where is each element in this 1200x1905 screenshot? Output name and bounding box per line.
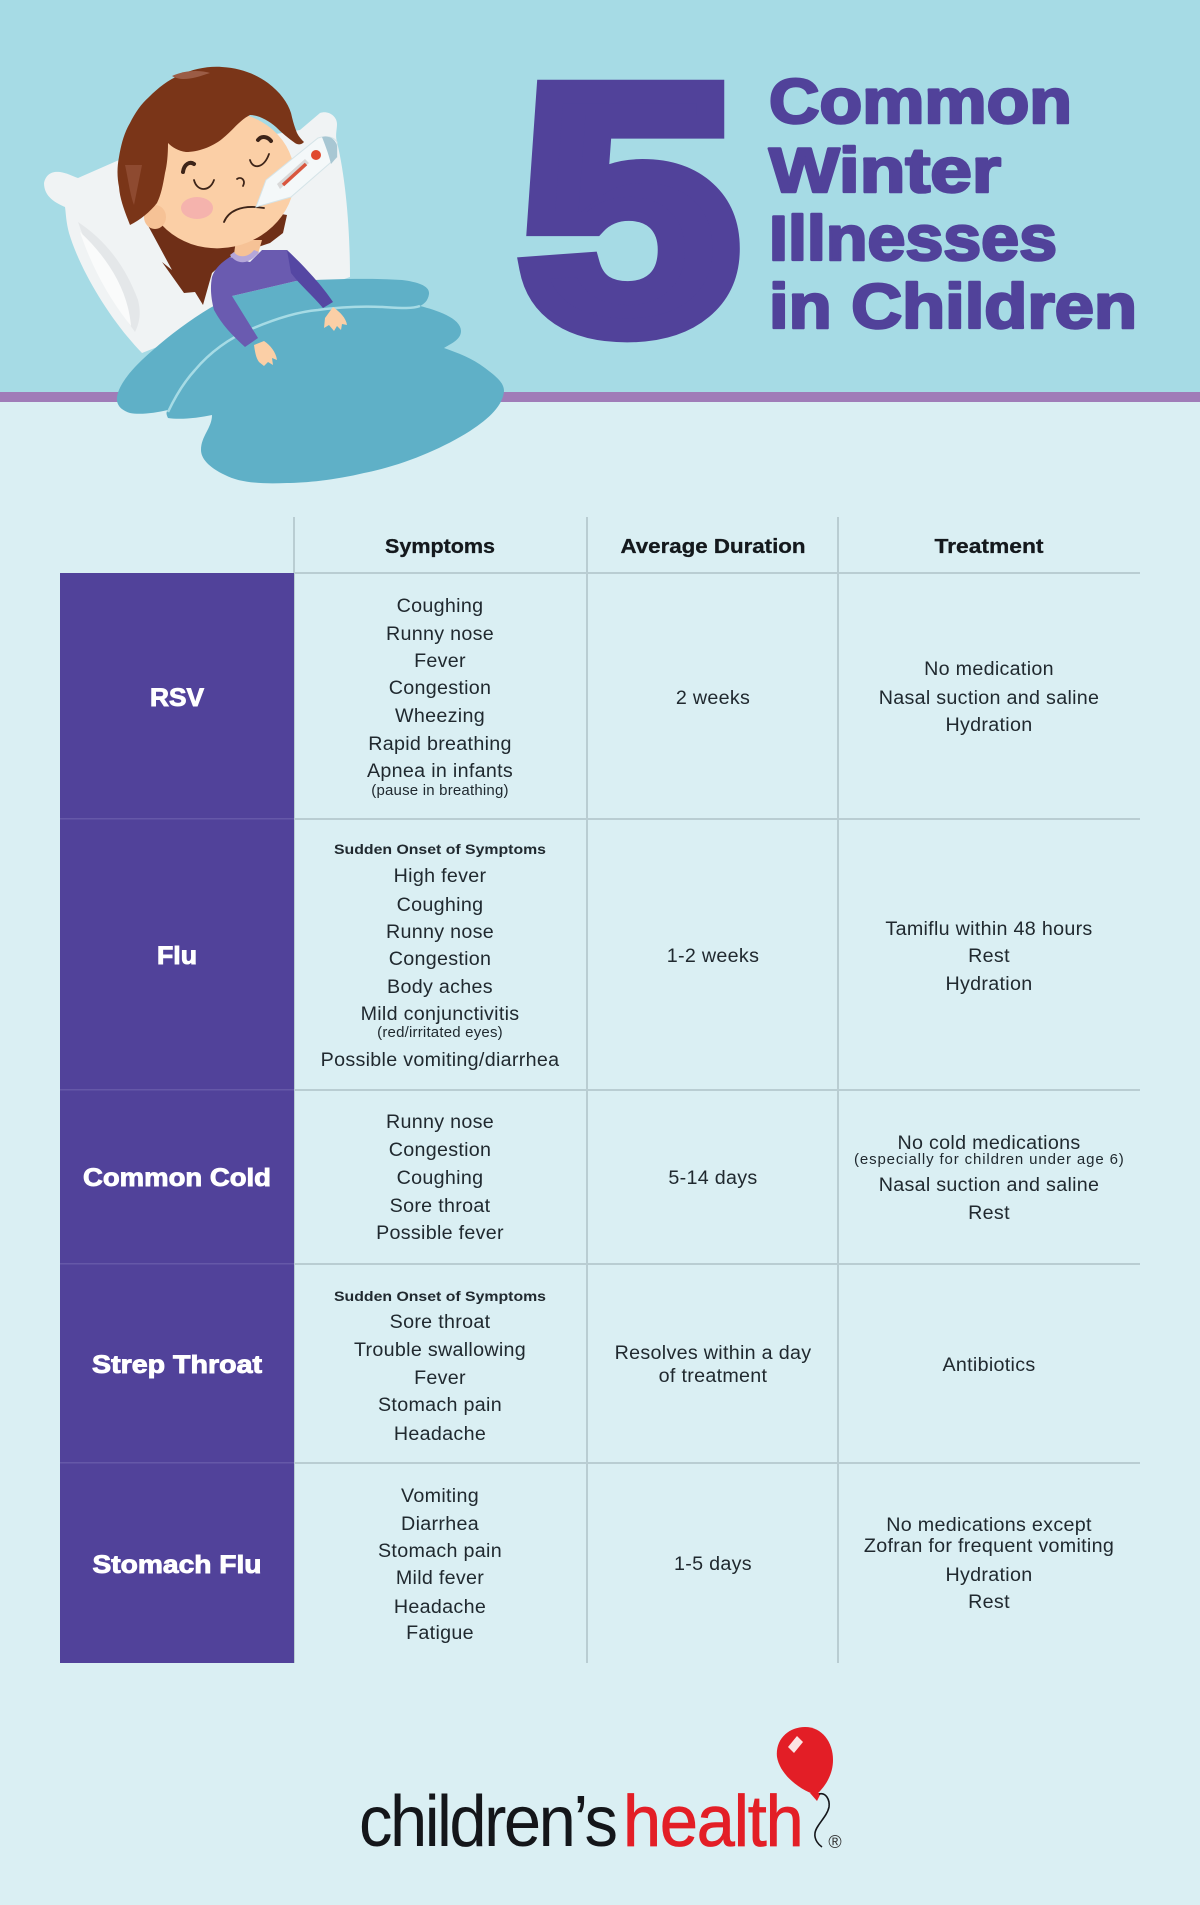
Common Cold treatment: No cold medications xyxy=(898,1132,1080,1154)
icon: red balloon xyxy=(777,1727,833,1847)
row label: Stomach Flu: Stomach Flu xyxy=(92,1551,262,1579)
row label: Stomach Flu xyxy=(60,1463,294,1663)
RSV duration: 2 weeks xyxy=(676,687,750,709)
Common Cold symptoms: Sore throat xyxy=(390,1195,491,1217)
RSV symptoms: (pause in breathing) xyxy=(371,782,509,799)
RSV symptoms xyxy=(367,595,513,799)
Flu symptoms: Mild conjunctivitis xyxy=(361,1003,519,1025)
title: Illnesses xyxy=(769,204,1057,274)
Flu symptoms: High fever xyxy=(394,865,487,887)
Common Cold symptoms: Congestion xyxy=(389,1139,491,1161)
thermometer xyxy=(256,137,337,207)
Common Cold symptoms: Runny nose xyxy=(386,1111,494,1133)
Common Cold treatment: (especially for children under age 6) xyxy=(854,1151,1124,1168)
Flu duration: 1-2 weeks xyxy=(667,945,759,967)
Flu symptoms: (red/irritated eyes) xyxy=(377,1024,503,1041)
Flu treatment: Hydration xyxy=(946,973,1032,995)
Stomach Flu symptoms: Fatigue xyxy=(406,1622,474,1644)
Flu treatment xyxy=(885,918,1093,995)
row label: Strep Throat: Strep Throat xyxy=(92,1351,263,1379)
title xyxy=(769,67,1137,342)
RSV symptoms: Runny nose xyxy=(386,623,494,645)
logo wordmark xyxy=(359,1780,803,1862)
Stomach Flu treatment: Rest xyxy=(968,1591,1010,1613)
title: Winter xyxy=(769,136,1001,206)
Strep Throat symptoms: Trouble swallowing xyxy=(354,1339,526,1361)
Flu symptoms: Congestion xyxy=(389,948,491,970)
RSV treatment: No medication xyxy=(924,658,1054,680)
row: Flu xyxy=(60,819,1093,1090)
Strep Throat duration: of treatment xyxy=(659,1365,768,1387)
row label: Flu xyxy=(60,819,294,1090)
Strep Throat symptoms: Fever xyxy=(414,1367,466,1389)
RSV symptoms: Wheezing xyxy=(395,705,485,727)
back hair xyxy=(145,200,287,305)
row label: RSV xyxy=(60,573,294,819)
row: Strep Throat xyxy=(60,1264,1036,1463)
row label: Flu: Flu xyxy=(157,942,197,970)
RSV symptoms: Rapid breathing xyxy=(368,733,512,755)
Flu symptoms: Runny nose xyxy=(386,921,494,943)
table header: Treatment xyxy=(934,536,1044,558)
ear xyxy=(144,205,166,229)
big number 5: 5 xyxy=(521,18,737,400)
RSV symptoms: Congestion xyxy=(389,677,491,699)
Common Cold treatment: Rest xyxy=(968,1202,1010,1224)
Strep Throat symptoms: Headache xyxy=(394,1423,486,1445)
Flu symptoms xyxy=(321,841,559,1071)
RSV treatment xyxy=(879,658,1099,736)
row label: RSV: RSV xyxy=(150,684,204,712)
row label: Common Cold xyxy=(60,1090,294,1264)
purple divider line xyxy=(0,392,1200,402)
row: Common Cold xyxy=(60,1090,1124,1264)
sweater xyxy=(211,250,333,347)
Common Cold duration: 5-14 days xyxy=(668,1167,758,1189)
head xyxy=(133,98,307,262)
Strep Throat duration: Resolves within a day xyxy=(615,1342,811,1364)
Common Cold symptoms xyxy=(376,1111,504,1244)
pillow xyxy=(44,112,350,353)
neck xyxy=(234,240,262,262)
hands xyxy=(254,307,347,366)
Stomach Flu treatment xyxy=(864,1514,1114,1613)
row label: Common Cold: Common Cold xyxy=(83,1164,271,1192)
RSV symptoms: Coughing xyxy=(397,595,483,617)
registered mark: ® xyxy=(828,1832,842,1852)
hair xyxy=(118,67,304,225)
Strep Throat symptoms: Stomach pain xyxy=(378,1394,502,1416)
logo wordmark: health xyxy=(623,1780,803,1861)
blanket xyxy=(117,279,504,483)
Strep Throat symptoms: Sudden Onset of Symptoms xyxy=(334,1288,546,1304)
Common Cold treatment: Nasal suction and saline xyxy=(879,1174,1099,1196)
face xyxy=(181,137,271,222)
Flu symptoms: Possible vomiting/diarrhea xyxy=(321,1049,559,1071)
Flu treatment: Tamiflu within 48 hours xyxy=(885,918,1093,940)
Stomach Flu symptoms xyxy=(378,1485,502,1644)
RSV symptoms: Fever xyxy=(414,650,466,672)
Common Cold symptoms: Coughing xyxy=(397,1167,483,1189)
Strep Throat symptoms xyxy=(334,1288,546,1445)
table header: Average Duration xyxy=(620,536,806,558)
logo: Children's Health xyxy=(359,1727,842,1862)
row: RSV xyxy=(60,573,1099,819)
row label: Strep Throat xyxy=(60,1264,294,1463)
title: Common xyxy=(769,67,1072,137)
Flu symptoms: Sudden Onset of Symptoms xyxy=(334,841,546,857)
Strep Throat treatment: Antibiotics xyxy=(942,1354,1036,1376)
table header xyxy=(385,536,1044,558)
Strep Throat symptoms: Sore throat xyxy=(390,1311,491,1333)
table header: Symptoms xyxy=(385,536,495,558)
RSV symptoms: Apnea in infants xyxy=(367,760,513,782)
Stomach Flu symptoms: Headache xyxy=(394,1596,486,1618)
illustration: sick child in bed xyxy=(44,67,504,483)
Common Cold treatment xyxy=(854,1132,1124,1224)
Stomach Flu treatment: Hydration xyxy=(946,1564,1032,1586)
Stomach Flu treatment: Zofran for frequent vomiting xyxy=(864,1535,1114,1557)
Flu treatment: Rest xyxy=(968,945,1010,967)
row: Stomach Flu xyxy=(60,1463,1114,1663)
Flu symptoms: Body aches xyxy=(387,976,493,998)
Stomach Flu symptoms: Diarrhea xyxy=(401,1513,479,1535)
Stomach Flu treatment: No medications except xyxy=(886,1514,1092,1536)
Stomach Flu duration: 1-5 days xyxy=(674,1553,752,1575)
Flu symptoms: Coughing xyxy=(397,894,483,916)
header band xyxy=(0,0,1200,392)
Stomach Flu symptoms: Stomach pain xyxy=(378,1540,502,1562)
Common Cold symptoms: Possible fever xyxy=(376,1222,504,1244)
table grid xyxy=(293,517,1140,1663)
Stomach Flu symptoms: Mild fever xyxy=(396,1567,484,1589)
logo wordmark: children’s xyxy=(359,1781,616,1862)
row divider lines on the purple column xyxy=(60,818,294,1464)
RSV treatment: Hydration xyxy=(946,714,1032,736)
Strep Throat duration xyxy=(615,1342,811,1387)
title: in Children xyxy=(769,272,1137,342)
RSV treatment: Nasal suction and saline xyxy=(879,687,1099,709)
Stomach Flu symptoms: Vomiting xyxy=(401,1485,479,1507)
